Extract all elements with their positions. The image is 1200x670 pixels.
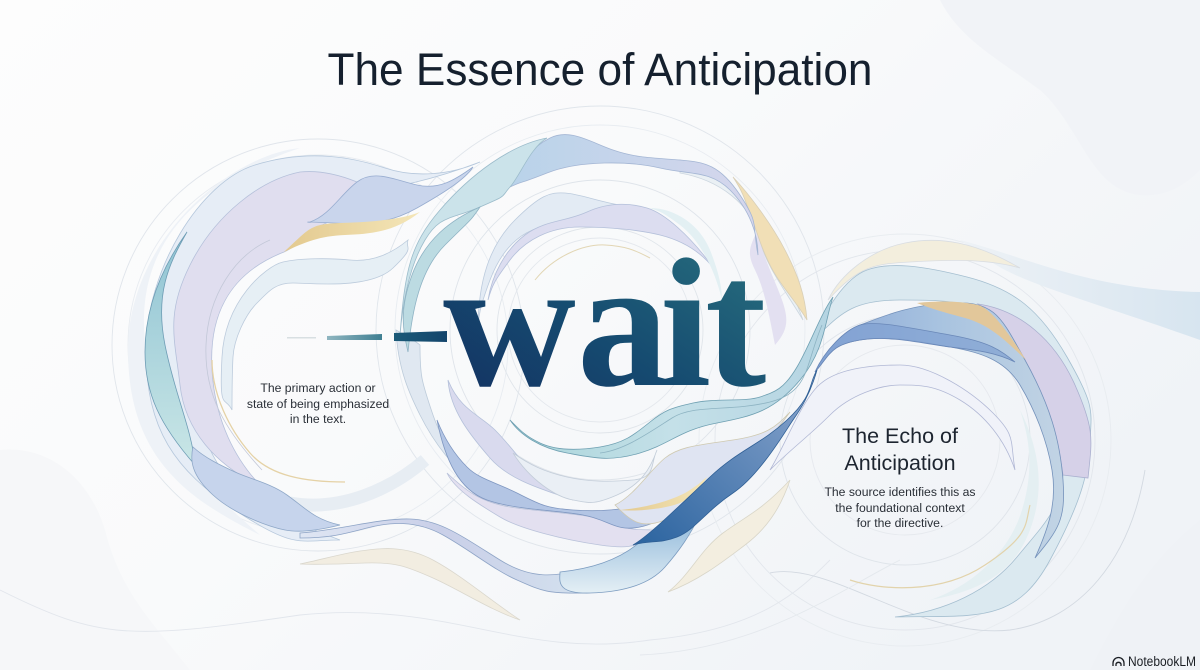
left loop ribbons: [128, 148, 480, 541]
ribbon: left lavender inner line: [206, 240, 270, 470]
ribbon: inner gold arc: [535, 245, 650, 280]
ribbon: lower pale arc: [290, 460, 425, 505]
ribbon: center lavender lower right: [750, 230, 786, 345]
heading: the echo of anticipation: [842, 424, 958, 475]
ribbon: upper blue crest: [308, 167, 473, 223]
s-curve wave ribbons: [510, 297, 833, 593]
thin concentric lines: [0, 106, 1145, 655]
ribbon: center lavender strip: [448, 380, 573, 500]
ribbon: center top ring: [510, 135, 758, 255]
right loop ribbons: [770, 240, 1091, 617]
ribbon: lower pale loop band: [221, 240, 408, 410]
ribbon: s-curve teal: [510, 297, 833, 458]
ribbon: s-curve gold: [620, 477, 707, 511]
ribbon: center left descent: [396, 330, 500, 505]
center loop ribbons: [396, 135, 807, 547]
title: The Essence of Anticipation: [328, 44, 872, 95]
ribbon: mid pale band: [615, 412, 790, 524]
ribbon: left main band: [146, 156, 480, 541]
ribbon: center top right pale: [680, 160, 803, 320]
ribbon: left outer halo: [128, 148, 300, 535]
ribbon: center left teal: [400, 138, 547, 335]
ribbon: center gold: [733, 177, 807, 320]
text block: primary action: [247, 381, 389, 426]
ribbon: gold lower arc: [850, 505, 1030, 588]
ribbon: right dark crest: [815, 323, 1015, 372]
ribbon: center pale strip: [513, 450, 657, 502]
text block: echo description: The source identifies this as: [824, 485, 976, 499]
heading: the echo of anticipation: Anticipation: [844, 451, 956, 475]
ribbon: under-blue pale lavender: [447, 473, 655, 547]
lower sweeping ribbons: [300, 480, 790, 620]
ribbon: deep blue diagonal: [633, 370, 817, 545]
ribbon: right blue body: [815, 303, 1064, 558]
ribbon: left teal: [145, 232, 195, 465]
keyword: wait: wait: [443, 221, 766, 425]
ribbon: right gold: [917, 302, 1026, 360]
text block: primary action: in the text.: [290, 412, 346, 426]
ribbon: inner right lavender ring: [770, 365, 1015, 470]
ribbon: s-curve inner line: [600, 325, 822, 453]
ribbon: left lavender: [174, 172, 357, 487]
ribbon: right lavender: [978, 304, 1091, 478]
ribbon: sky lower: [560, 515, 700, 593]
text block: primary action: state of being emphasized: [247, 397, 389, 411]
keyword: dashes leading into wait: [287, 331, 447, 342]
ribbon: inner right pale teal: [930, 410, 1039, 600]
ribbon: right beige: [668, 480, 790, 592]
text block: echo description: the foundational context: [835, 501, 965, 515]
ribbon: pale inner ring teal: [403, 207, 480, 352]
ribbon: right outer teal: [813, 266, 1091, 617]
ribbon: inner top right sky: [650, 208, 722, 300]
ribbon: lower-left blue: [192, 447, 340, 531]
heading: the echo of anticipation: The Echo of: [842, 424, 958, 448]
ribbon: inner top pale: [478, 193, 620, 330]
text block: echo description: for the directive.: [857, 516, 943, 530]
ribbon: top-right pale wave: [960, 240, 1200, 340]
text block: echo description: [824, 485, 976, 530]
text block: primary action: The primary action or: [260, 381, 376, 395]
ribbon: gold band: [284, 212, 420, 252]
ribbon: gold inner arc: [212, 360, 345, 482]
ribbon: bottom beige: [300, 549, 520, 620]
ribbon: top right beige arc: [828, 240, 1020, 300]
ribbon: inner top lavender: [488, 204, 715, 300]
ribbon: bottom long sweep: [300, 510, 700, 593]
ribbon: center-left blue: [437, 420, 693, 528]
